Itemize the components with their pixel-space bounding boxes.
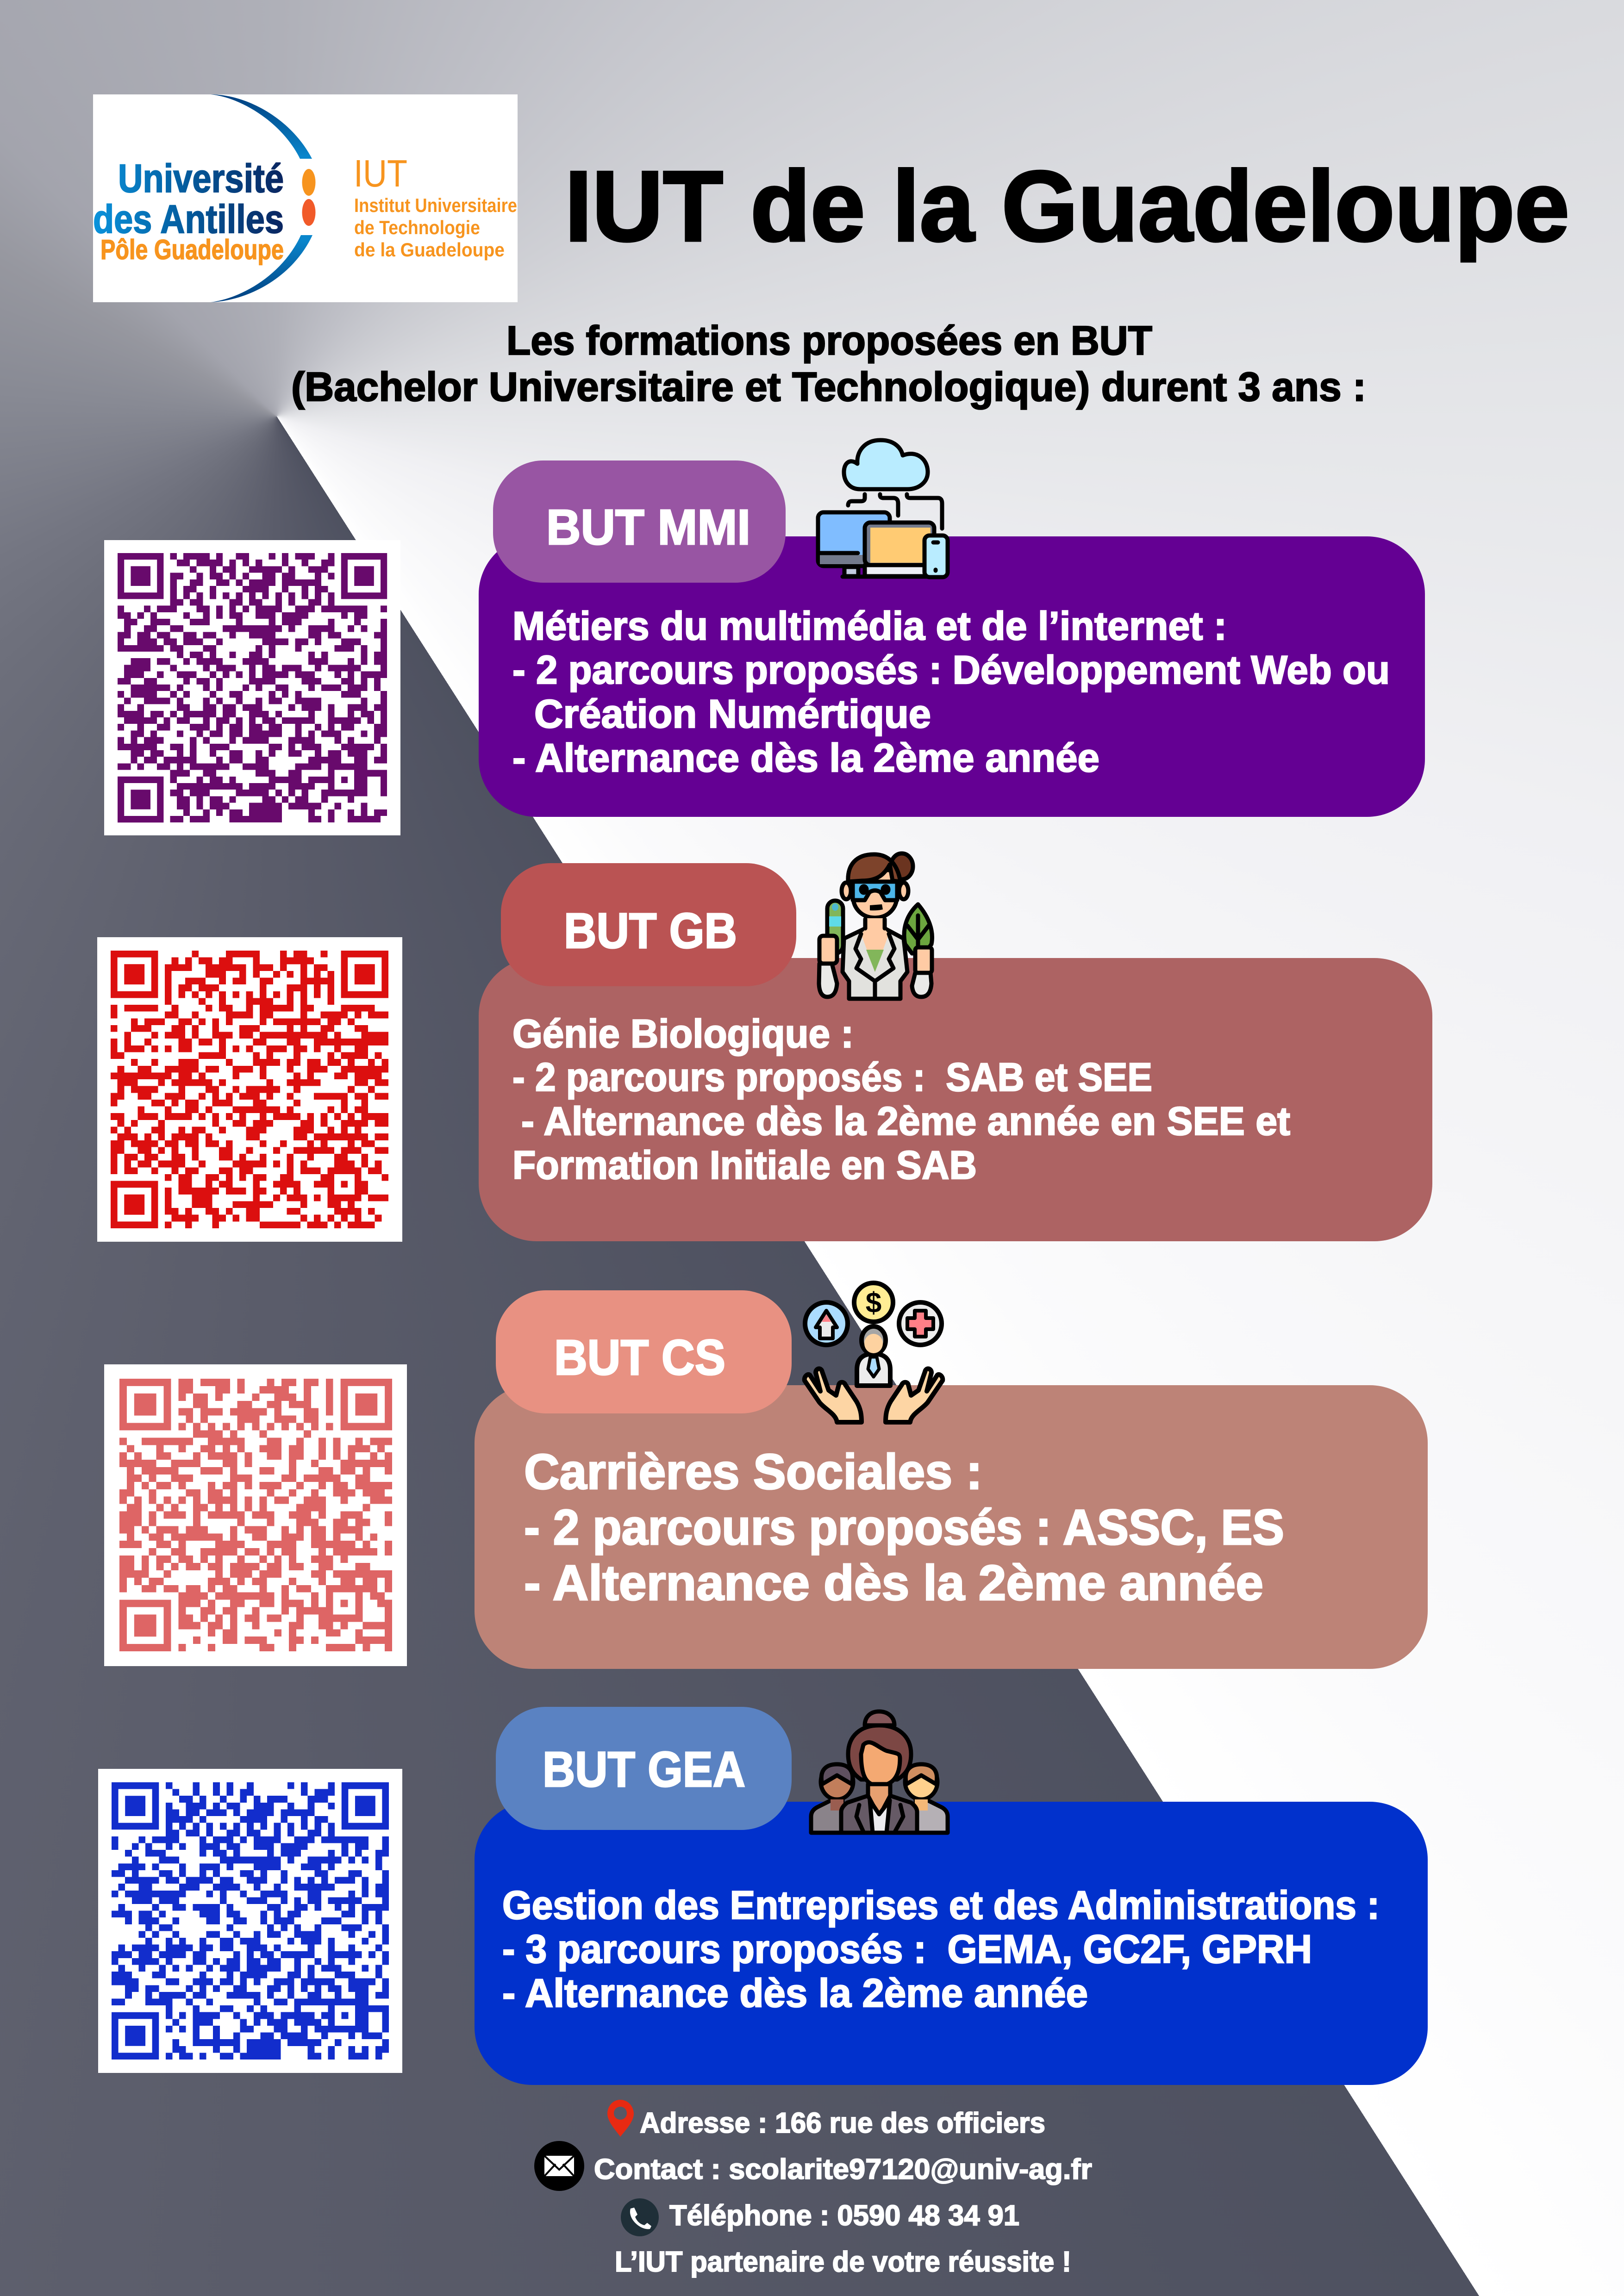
logo text Pôle Guadeloupe: Pôle Guadeloupe [100, 234, 284, 265]
description MMI: Métiers du multimédia et de l’internet : [512, 604, 1227, 648]
title: IUT de la Guadeloupe [565, 150, 1569, 262]
panel: BUT GEA [475, 1707, 1428, 2085]
card GB background [479, 958, 1432, 1241]
pill BUT CS [496, 1290, 792, 1413]
subtitle [291, 317, 1366, 410]
icon: team of three people [811, 1711, 948, 1833]
logo dots [302, 169, 316, 226]
address: Adresse : 166 rue des officiers [640, 2107, 1045, 2139]
pill BUT CS: BUT CS [554, 1329, 725, 1385]
logo text de Technologie: de Technologie [354, 217, 480, 238]
QR code: BUT GEA [98, 1769, 402, 2073]
description CS: Carrières Sociales : [524, 1444, 982, 1500]
logo text des Antilles: des Antilles [93, 197, 284, 242]
card MMI background [479, 536, 1425, 817]
icon: scientist with test tube and leaf [819, 853, 932, 999]
description GB [512, 1012, 1290, 1188]
icon: location pin [607, 2100, 634, 2137]
icon: hands holding services and person: $ [866, 1287, 881, 1319]
panel: BUT GB [479, 853, 1432, 1241]
description GB: - 2 parcours proposés : SAB et SEE [512, 1055, 1152, 1100]
description GEA [502, 1883, 1380, 2016]
icon: cloud and devices [818, 440, 948, 577]
panel: BUT MMI [479, 440, 1425, 817]
description CS: - Alternance dès la 2ème année [524, 1555, 1263, 1611]
pill BUT MMI: BUT MMI [546, 499, 750, 555]
card CS background [475, 1385, 1428, 1669]
logo arc [211, 94, 312, 302]
pill BUT GB [501, 863, 796, 986]
card GEA background [475, 1802, 1428, 2085]
description GB: Formation Initiale en SAB [512, 1143, 977, 1188]
description MMI: Création Numértique [534, 692, 931, 736]
panel: BUT CS [475, 1283, 1428, 1669]
description GB: - Alternance dès la 2ème année en SEE et [521, 1099, 1290, 1144]
icon: envelope [534, 2141, 584, 2191]
QR code: BUT MMI [104, 540, 400, 835]
description MMI: - 2 parcours proposés : Développement Web ou [512, 648, 1390, 692]
icon: hands holding services and person [805, 1283, 943, 1422]
tagline: L’IUT partenaire de votre réussite ! [615, 2246, 1071, 2278]
description GEA: Gestion des Entreprises et des Administrations : [502, 1883, 1380, 1928]
logo text Université: Université [118, 156, 284, 201]
description MMI: - Alternance dès la 2ème année [512, 736, 1099, 780]
description MMI [512, 604, 1390, 780]
pill BUT GB: BUT GB [564, 902, 737, 958]
subtitle: (Bachelor Universitaire et Technologique) durent 3 ans : [291, 364, 1366, 410]
contact: Contact : scolarite97120@univ-ag.fr [594, 2153, 1092, 2185]
description CS [524, 1444, 1284, 1611]
pill BUT GEA [496, 1707, 792, 1830]
logo text Institut Universitaire: Institut Universitaire [354, 194, 517, 216]
pill BUT MMI [493, 460, 786, 583]
telephone: Téléphone : 0590 48 34 91 [669, 2200, 1019, 2232]
logo text IUT: IUT [354, 152, 407, 195]
description GEA: - 3 parcours proposés : GEMA, GC2F, GPRH [502, 1927, 1312, 1972]
pill BUT GEA: BUT GEA [543, 1741, 745, 1797]
description GB: Génie Biologique : [512, 1012, 854, 1056]
description GEA: - Alternance dès la 2ème année [502, 1971, 1088, 2016]
icon: phone [621, 2198, 659, 2236]
description CS: - 2 parcours proposés : ASSC, ES [524, 1499, 1284, 1555]
logo: Université des Antilles and IUT [93, 94, 518, 302]
logo text de la Guadeloupe: de la Guadeloupe [354, 239, 505, 261]
QR code: BUT GB [97, 937, 402, 1242]
footer: contact details [534, 2100, 1092, 2278]
subtitle: Les formations proposées en BUT [506, 317, 1152, 363]
QR code: BUT CS [104, 1364, 407, 1666]
